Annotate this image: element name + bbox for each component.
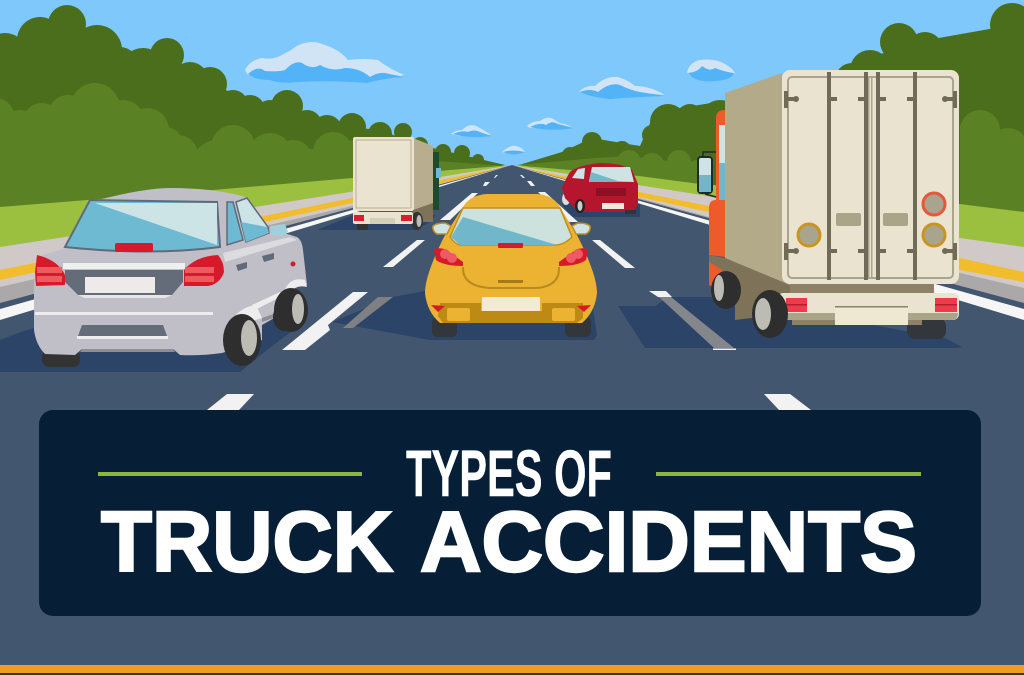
heading line: types of xyxy=(98,436,921,510)
back tree line right xyxy=(519,3,1024,212)
heading: truck accidents: ACCIDENTS xyxy=(420,495,917,590)
front tree line left xyxy=(0,83,505,208)
front tree line right xyxy=(517,110,1024,212)
heading line: types of: TYPES OF xyxy=(406,436,612,510)
red car xyxy=(562,163,638,214)
heading: truck accidents xyxy=(101,495,917,590)
road surface xyxy=(0,165,1024,675)
small white truck xyxy=(353,137,441,230)
sky xyxy=(0,0,1024,190)
back tree line left xyxy=(0,5,505,210)
silver car xyxy=(34,188,308,367)
lane dashes xyxy=(207,175,811,410)
clouds xyxy=(245,42,735,154)
yellow car xyxy=(425,194,597,337)
large delivery truck xyxy=(698,70,959,339)
road shadows xyxy=(0,203,962,372)
heading: truck accidents: TRUCK xyxy=(101,495,393,590)
bottom orange strip xyxy=(0,665,1024,675)
road edge lines xyxy=(0,165,1024,320)
title panel xyxy=(39,410,981,616)
grass and road shoulders xyxy=(0,165,1024,305)
